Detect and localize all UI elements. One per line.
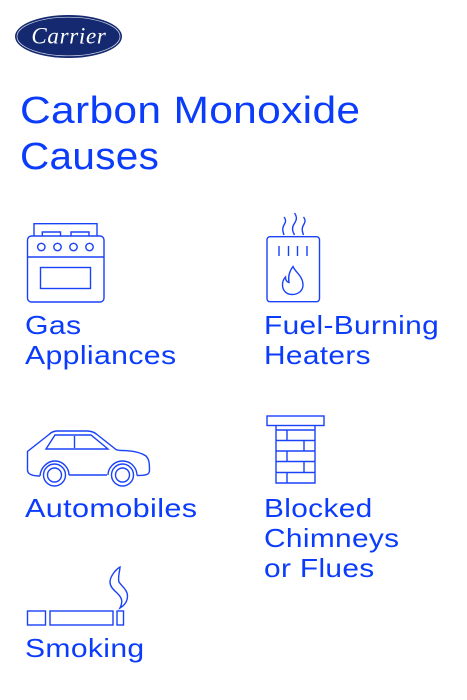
label: blocked chimneys or flues: or Flues xyxy=(264,553,375,583)
icon: gas oven xyxy=(28,224,104,302)
label: automobiles: Automobiles xyxy=(25,493,197,523)
label: gas appliances: Gas xyxy=(25,310,82,340)
icon: fuel-burning heater xyxy=(267,213,320,302)
logo: Carrier xyxy=(15,15,122,58)
label: fuel-burning heaters: Fuel-Burning xyxy=(264,310,439,340)
label: gas appliances xyxy=(25,310,176,370)
label: smoking: Smoking xyxy=(25,633,144,663)
label: blocked chimneys or flues: Chimneys xyxy=(264,523,399,553)
label: gas appliances: Appliances xyxy=(25,340,176,370)
title: Carbon Monoxide xyxy=(20,90,360,132)
label: blocked chimneys or flues xyxy=(264,493,399,583)
icon: chimney xyxy=(267,416,324,483)
label: fuel-burning heaters: Heaters xyxy=(264,340,371,370)
icon: cigarette xyxy=(28,567,128,625)
icon: car xyxy=(28,431,150,486)
label: blocked chimneys or flues: Blocked xyxy=(264,493,373,523)
title xyxy=(20,90,360,178)
title: Causes xyxy=(20,136,159,178)
logo: Carrier: Carrier xyxy=(31,24,107,48)
label: fuel-burning heaters xyxy=(264,310,439,370)
